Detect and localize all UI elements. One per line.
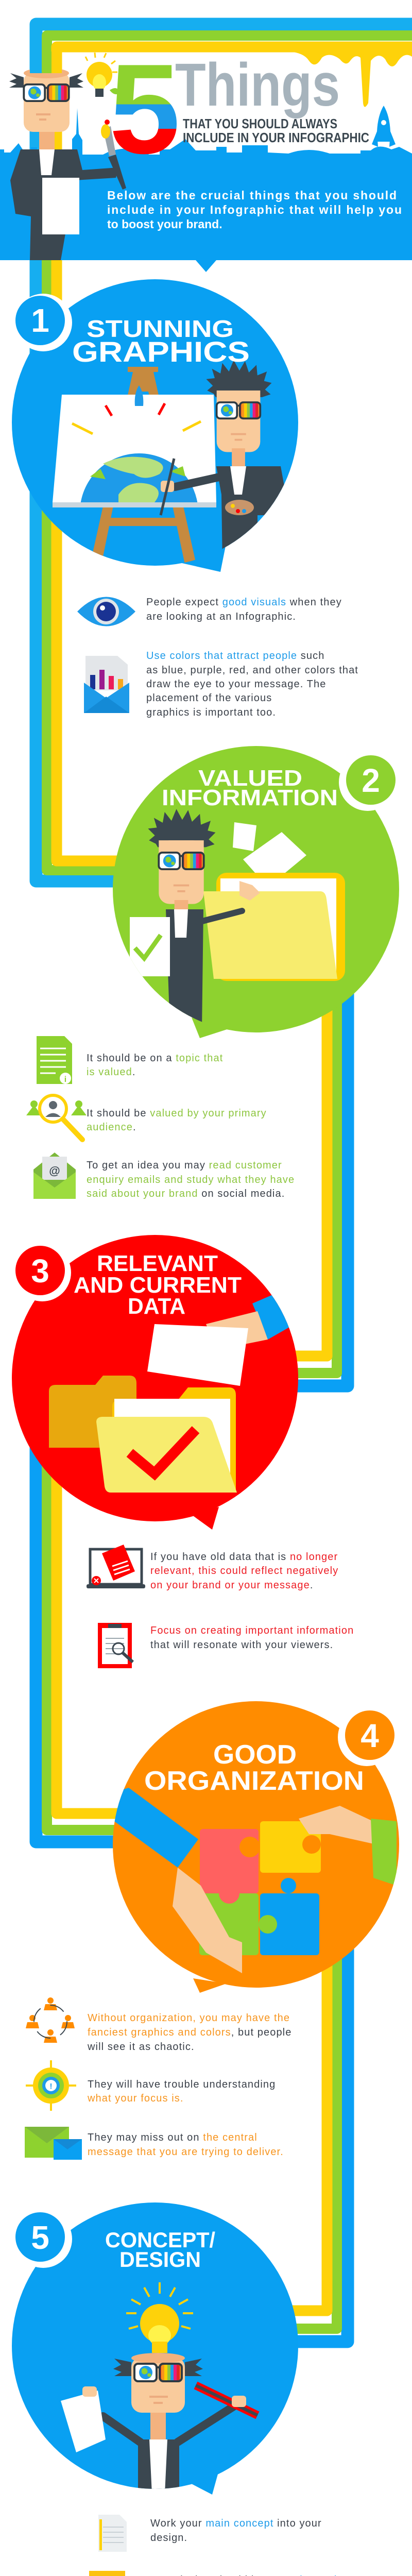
- text: without organization: Without organization, you may have the: [88, 2012, 290, 2024]
- text: focus: They will have trouble understanding: [88, 2079, 276, 2090]
- text: topic: It should be on a topic that: [87, 1053, 223, 1064]
- heading: valued information: VALUED: [198, 766, 302, 791]
- heading: stunning graphics: STUNNING: [87, 315, 234, 342]
- text: focus: [150, 1625, 354, 1651]
- illustration: puzzle hands: [111, 1788, 397, 1973]
- heading: concept design: [105, 2228, 215, 2272]
- panel 5: concept design circle: [12, 2202, 298, 2495]
- heading: good organization: ORGANIZATION: [144, 1766, 364, 1796]
- panel 1: stunning graphics circle: [12, 279, 298, 572]
- heading: relevant and current data: RELEVANT: [97, 1251, 218, 1276]
- intro text: [107, 189, 402, 231]
- badge 1: [14, 294, 72, 351]
- text: use colors: graphics is important too.: [146, 707, 276, 718]
- icon: laptop with floppy: [87, 1545, 145, 1588]
- icon: email envelope: @: [49, 1164, 60, 1177]
- text: old data: relevant, this could reflect negatively: [150, 1565, 338, 1577]
- text: customer enquiry: To get an idea you may read customer: [87, 1160, 282, 1171]
- heading: relevant and current data: [74, 1251, 242, 1319]
- badge 5: [14, 2210, 72, 2268]
- text: old data: [150, 1551, 338, 1591]
- yellow paint drips top right: [288, 52, 412, 107]
- icon: people network: [26, 1997, 75, 2043]
- text: central message: [88, 2132, 284, 2158]
- text: without organization: [87, 2012, 291, 2053]
- icon: lightbulb: [85, 53, 120, 97]
- text: focus: that will resonate with your viewers.: [150, 1639, 333, 1651]
- icon: audience magnifier: [26, 1095, 87, 1140]
- text: good visuals: are looking at an Infographic.: [146, 611, 296, 622]
- header skyline band: [0, 108, 412, 272]
- text: customer enquiry: said about your brand on social media.: [87, 1188, 285, 1199]
- intro text: Below are the crucial things that you should: [107, 189, 397, 202]
- text: main concept: design.: [150, 2532, 187, 2544]
- icon: clipboard magnifier: [98, 1623, 133, 1668]
- illustration: man with folder: [130, 809, 345, 1030]
- heading: good organization: [144, 1740, 364, 1796]
- text: without organization: fanciest graphics and colors, but people: [88, 2027, 291, 2038]
- icon: email envelope: [33, 1153, 76, 1199]
- badge 2: 2: [362, 762, 380, 799]
- text: old data: on your brand or your message.: [150, 1580, 314, 1591]
- icon: document pencil: [98, 2515, 127, 2552]
- text: good visuals: [146, 597, 342, 622]
- panel 2: valued information circle: [113, 746, 399, 1038]
- heading: concept design: DESIGN: [119, 2247, 201, 2272]
- title: 5 Things: 5: [109, 37, 180, 180]
- illustration: folders with check: [49, 1288, 304, 1493]
- text: customer enquiry: [87, 1160, 295, 1199]
- heading: stunning graphics: [72, 315, 250, 368]
- text: focus: what your focus is.: [87, 2093, 184, 2104]
- icon: target: [26, 2060, 76, 2111]
- title: 5 Things: [109, 37, 369, 180]
- badge 3: [13, 1244, 71, 1301]
- text: use colors: Use colors that attract people such: [146, 650, 324, 662]
- icon: rocket header: [372, 106, 396, 147]
- text: focus: Focus on creating important information: [150, 1625, 354, 1636]
- badge 1: 1: [31, 302, 49, 339]
- panel 4: good organization circle: [111, 1701, 399, 1993]
- badge 4: [338, 1708, 396, 1766]
- text: use colors: as blue, purple, red, and other colors that: [146, 665, 358, 676]
- text: primary audience: audience.: [87, 1122, 136, 1133]
- heading: good organization: GOOD: [213, 1740, 297, 1770]
- text: use colors: placement of the various: [146, 692, 272, 704]
- heading: valued information: [162, 766, 338, 810]
- intro text: include in your Infographic that will help you: [107, 203, 402, 216]
- text: main concept: [150, 2518, 322, 2544]
- badge 3: 3: [31, 1252, 49, 1290]
- text: main concept: Work your main concept into your: [150, 2518, 322, 2529]
- badge 2: [339, 753, 397, 811]
- heading: concept design: CONCEPT/: [105, 2228, 215, 2252]
- panel 3: relevant and current data circle: [12, 1235, 304, 1530]
- intro text: to boost your brand.: [107, 217, 222, 231]
- icon: envelope chart: [84, 656, 129, 713]
- title: 5 Things: Things: [175, 51, 340, 119]
- icon: chat bubbles: [89, 2571, 136, 2576]
- text: primary audience: It should be valued by your primary: [87, 1108, 267, 1119]
- text: customer enquiry: enquiry emails and study what they have: [87, 1174, 295, 1185]
- heading: relevant and current data: DATA: [128, 1294, 185, 1319]
- text: good visuals: People expect good visuals when they: [146, 597, 342, 608]
- title: 5 Things: INCLUDE IN YOUR INFOGRAPHIC: [183, 130, 369, 145]
- icon: target: !: [49, 2082, 53, 2091]
- text: without organization: will see it as chaotic.: [87, 2041, 195, 2053]
- heading: relevant and current data: AND CURRENT: [74, 1273, 242, 1298]
- heading: valued information: INFORMATION: [162, 785, 338, 810]
- illustration: easel and painter: [53, 360, 286, 572]
- icon: document info: [37, 1036, 72, 1084]
- text: focus: [87, 2079, 276, 2104]
- icon: eye: [77, 597, 135, 626]
- badge 5: 5: [31, 2219, 49, 2256]
- illustration: man with lightbulb: [61, 2282, 258, 2494]
- text: topic: [87, 1053, 223, 1078]
- text: topic: is valued.: [87, 1066, 136, 1078]
- text: use colors: [146, 650, 358, 718]
- badge 4: 4: [360, 1717, 379, 1754]
- heading: stunning graphics: GRAPHICS: [72, 335, 250, 368]
- text: central message: message that you are trying to deliver.: [88, 2146, 284, 2158]
- text: primary audience: [87, 1108, 267, 1133]
- text: old data: If you have old data that is no longer: [150, 1551, 338, 1563]
- title: 5 Things: THAT YOU SHOULD ALWAYS: [183, 116, 337, 131]
- icon: document info: i: [64, 1075, 66, 1084]
- header man character: [9, 52, 126, 260]
- text: central message: They may miss out on the central: [88, 2132, 258, 2143]
- icon: chat envelopes: [25, 2127, 82, 2160]
- text: use colors: draw the eye to your message. The: [146, 679, 326, 690]
